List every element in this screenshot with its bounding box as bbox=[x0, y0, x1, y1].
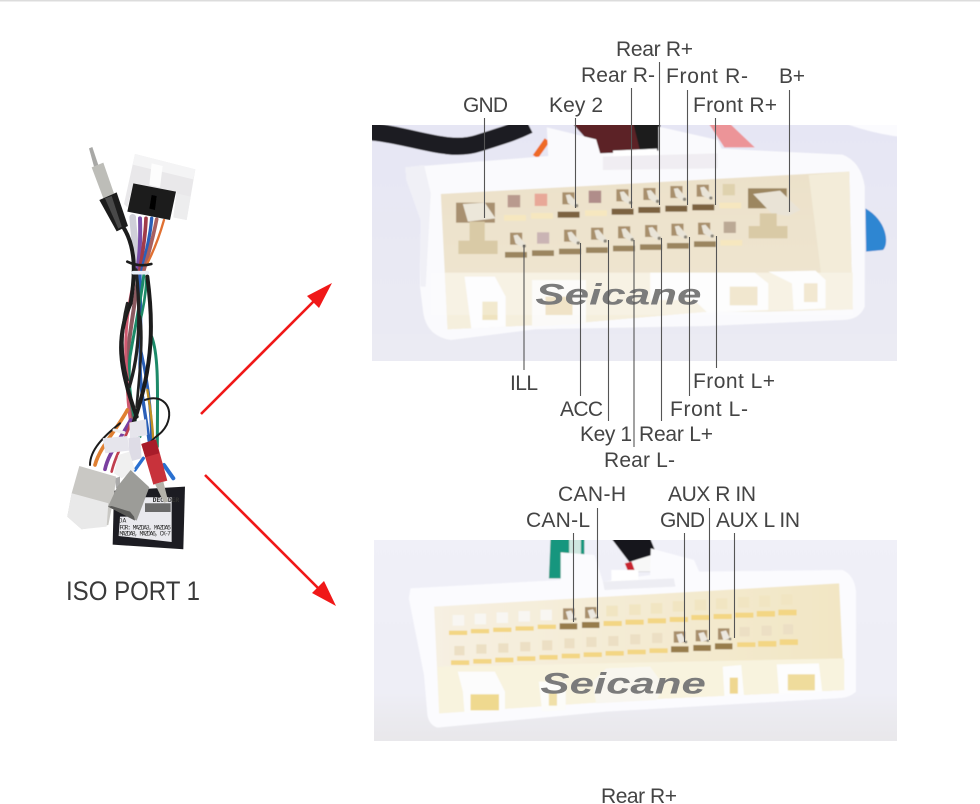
leader lines: connector 1 top bbox=[484, 62, 790, 218]
labels: connector 1 bottom pins: ACC bbox=[560, 398, 603, 421]
labels: connector 1 top pins: Front R+ bbox=[693, 94, 777, 117]
latch boxes bbox=[458, 672, 505, 713]
labels: connector 2 pins: GND bbox=[660, 509, 705, 532]
housing bbox=[409, 548, 856, 728]
wire bundle bbox=[90, 217, 173, 478]
photo: connector 1 bbox=[370, 120, 900, 363]
holes bbox=[508, 195, 520, 207]
photo: connector 2 bbox=[370, 538, 900, 742]
cavity bbox=[434, 583, 844, 713]
photo: connector 1: Seicane bbox=[535, 278, 701, 311]
cavity bbox=[441, 172, 853, 329]
white top connector bbox=[124, 154, 195, 220]
black decoder box: DA bbox=[119, 518, 126, 525]
labels: connector 1 top pins: B+ bbox=[779, 65, 805, 88]
top row holes and slots bbox=[453, 610, 552, 626]
dark slots and pins bbox=[560, 622, 732, 652]
labels: connector 1 top pins: Key 2 bbox=[549, 94, 603, 117]
wiring harness photo bbox=[67, 147, 195, 549]
labels: connector 1 bottom pins: Rear L- bbox=[604, 449, 675, 472]
latch boxes bbox=[464, 277, 506, 328]
labels: connector 1 top pins: Front R- bbox=[666, 65, 748, 88]
labels: connector 1 bottom pins: Front L- bbox=[670, 398, 748, 421]
black connector bbox=[127, 183, 176, 220]
grey center connector bbox=[108, 470, 149, 521]
labels: connector 1 top pins: GND bbox=[463, 94, 508, 117]
black decoder box: FOR: MAZDA3, MAZDA5 bbox=[119, 524, 171, 531]
leader lines: connector 2 bbox=[574, 508, 734, 642]
black decoder box: DECODER bbox=[153, 497, 179, 504]
labels: connector 1 bottom pins: Front L+ bbox=[693, 370, 775, 393]
labels: connector 1 bottom pins bbox=[510, 370, 775, 472]
grey left connector bbox=[67, 466, 116, 529]
red rca plug bbox=[141, 439, 167, 485]
slots bbox=[504, 203, 742, 246]
labels: connector 2 pins bbox=[526, 483, 800, 532]
antenna plug bbox=[89, 147, 128, 231]
labels: connector 1 bottom pins: Key 1 bbox=[580, 423, 632, 446]
photo: connector 2: Seicane bbox=[540, 668, 706, 701]
labels: connector 2 pins: CAN-L bbox=[526, 509, 590, 532]
labels: connector 1 bottom pins: ILL bbox=[510, 372, 538, 395]
black decoder box bbox=[113, 487, 185, 549]
labels: connector 1 top pins: Rear R- bbox=[581, 64, 655, 87]
black decoder box: MAZDA8, MAZDA6, CX-7 bbox=[119, 530, 171, 537]
big terminals bbox=[456, 203, 495, 223]
housing bbox=[405, 127, 865, 340]
labels: connector 2 pins: CAN-H bbox=[558, 483, 626, 506]
labels: connector 2 pins: AUX L IN bbox=[716, 509, 800, 532]
arrow: down right bbox=[205, 475, 336, 606]
labels: connector 2 pins: AUX R IN bbox=[668, 483, 756, 506]
bottom row holes bbox=[454, 624, 793, 655]
white rca plug bbox=[114, 452, 135, 478]
labels: connector 1 top pins: Rear R+ bbox=[616, 38, 693, 61]
pins bbox=[562, 192, 578, 208]
labels: connector 1 bottom pins: Rear L+ bbox=[639, 423, 713, 446]
labels: connector 1 top pins bbox=[463, 38, 805, 117]
iso port 1 caption: ISO PORT 1 bbox=[66, 576, 200, 606]
leader lines: connector 1 bottom bbox=[524, 236, 716, 447]
white tie labels bbox=[103, 436, 129, 453]
arrow: up right bbox=[201, 283, 332, 414]
